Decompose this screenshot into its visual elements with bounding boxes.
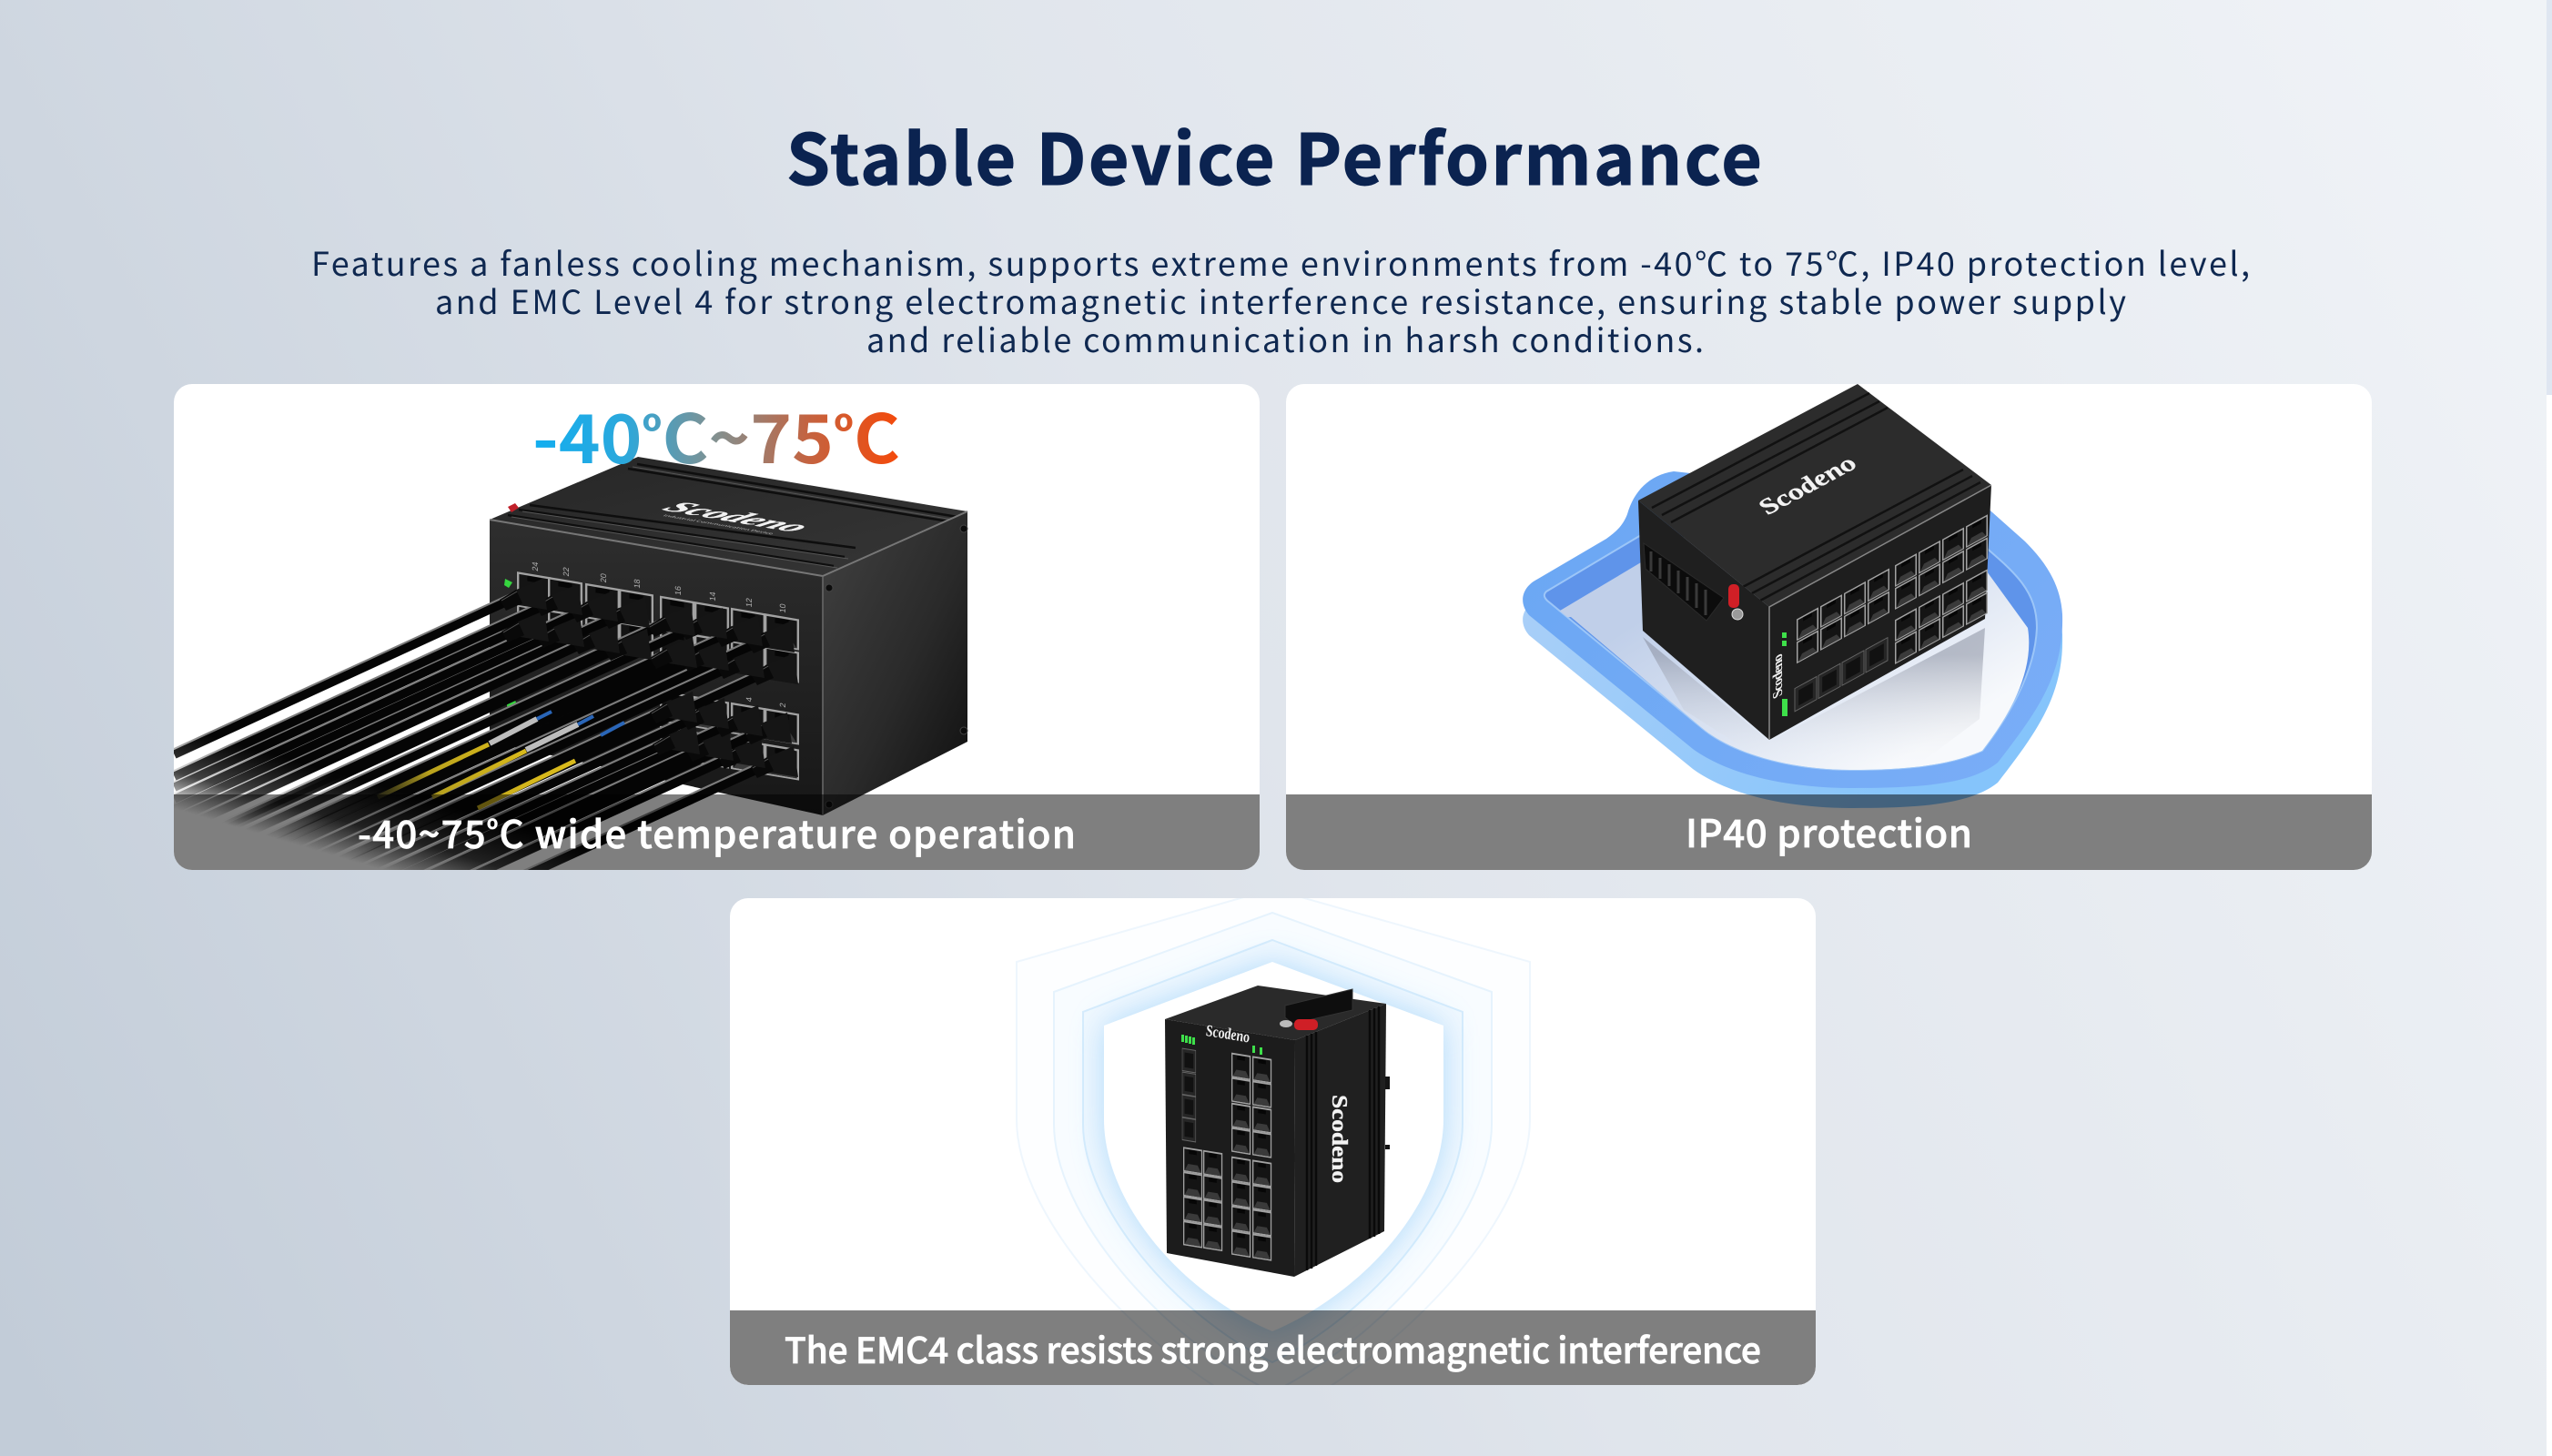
red ground pin — [1728, 584, 1743, 620]
cable plugs — [500, 579, 798, 778]
ring inner wall and floor — [1544, 510, 2037, 774]
description text block: and EMC Level 4 for strong electromagnetic interference resistance, ensuring stable power supply — [435, 277, 2126, 324]
RJ45 ports front: 10 — [778, 603, 787, 613]
logo on top face: Scodeno — [654, 499, 821, 535]
panel: IP40 protection — [1286, 384, 2372, 870]
right face — [1294, 1004, 1386, 1277]
description text block: Features a fanless cooling mechanism, supports extreme environments from -40℃ to 75℃, IP40 protection level, — [311, 238, 2250, 286]
RJ45 ports front: 16 — [673, 585, 683, 596]
caption text: -40~75 — [358, 804, 486, 860]
ports on front face — [1182, 1045, 1271, 1261]
front face — [1165, 1019, 1295, 1277]
caption text: IP40 protection — [1686, 804, 1972, 859]
temperature range heading: º — [834, 399, 854, 464]
DIN rail clips — [1704, 431, 1780, 493]
device: switch isometric — [1638, 384, 1991, 740]
caption strip — [174, 794, 1260, 870]
red ground pin — [1280, 1019, 1318, 1030]
device top face — [490, 457, 967, 576]
RJ45 ports front: 2 — [778, 703, 787, 708]
caption text: º — [487, 809, 498, 849]
description text block — [311, 238, 2250, 362]
RJ45 ports front — [517, 559, 799, 781]
RJ45 ports front: 14 — [708, 592, 717, 602]
caption text: C wide temperature operation — [500, 804, 1076, 860]
temperature range heading: º — [642, 399, 662, 464]
red pin — [508, 503, 519, 512]
device right face — [823, 511, 967, 815]
logo: Scodeno — [1750, 451, 1864, 519]
nested shields — [1017, 889, 1530, 1420]
front logo: Scodeno — [1206, 1021, 1250, 1046]
RJ45 ports front: 24 — [531, 561, 540, 571]
temperature range heading: -40 — [532, 386, 637, 483]
panel: wide temperature — [174, 384, 1260, 870]
side logo: Scodeno — [1327, 1095, 1351, 1183]
RJ45 ports front: 4 — [744, 696, 754, 703]
RJ45 ports front: 12 — [744, 597, 754, 608]
caption strip — [730, 1310, 1816, 1385]
temperature range heading: C~75 — [662, 386, 834, 483]
network cables — [174, 593, 755, 870]
ring side — [1523, 610, 2062, 808]
DIN clips — [1385, 1077, 1390, 1149]
RJ45 ports front: 6 — [708, 691, 717, 696]
panel: EMC4 — [730, 889, 1816, 1420]
ring top surface — [1523, 471, 2062, 788]
logo on top face: Industrial Communication Device — [662, 513, 776, 535]
caption text: The EMC4 class resists strong electromagnetic interference — [785, 1323, 1761, 1374]
ports and SFP on right face — [1795, 514, 1988, 719]
top face — [1638, 384, 1991, 607]
fiber cables — [378, 712, 624, 808]
description text block: and reliable communication in harsh conditions. — [866, 315, 1704, 362]
side logo: Scodeno — [1771, 651, 1786, 702]
terminal block — [1644, 543, 1724, 621]
device front face — [490, 520, 823, 815]
RJ45 ports front: 18 — [633, 579, 642, 589]
title: Stable Device Performance — [786, 105, 1762, 206]
status LEDs — [1181, 1035, 1262, 1055]
left face — [1638, 500, 1769, 740]
terminal block on top — [1285, 989, 1352, 1024]
shield ring — [1523, 471, 2062, 808]
right face — [1769, 485, 1991, 740]
caption strip — [1286, 794, 2372, 870]
device: switch upright — [1165, 986, 1390, 1277]
temperature range heading: C — [854, 386, 900, 483]
RJ45 ports front: 20 — [599, 572, 608, 583]
top face — [1165, 986, 1386, 1040]
power LEDs — [504, 579, 516, 712]
device: switch with cables — [174, 457, 968, 870]
right edge sliver — [2547, 0, 2552, 1456]
status LEDs — [1782, 632, 1787, 716]
RJ45 ports front: 22 — [562, 566, 571, 577]
